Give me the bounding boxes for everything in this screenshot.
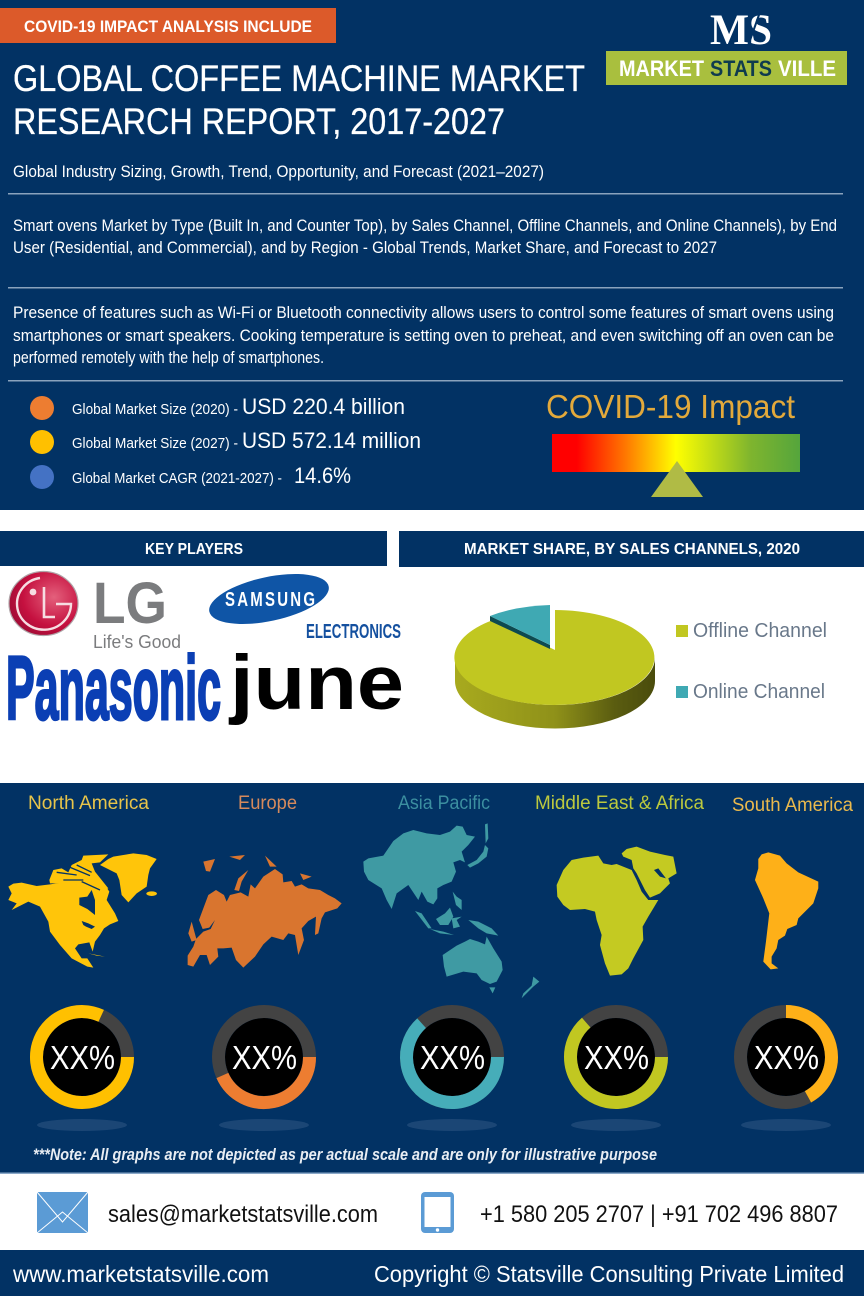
key statistics [30,394,421,489]
phone numbers: +1 580 205 2707 | +91 702 496 8807 [480,1201,838,1228]
donut: South America: XX% [754,1039,819,1076]
title: GLOBAL COFFEE MACHINE MARKET [13,58,585,99]
text block: report scope: User (Residential, and Commercial), and by Region - Global Trends, Market Share, and Forecast to 2027 [13,239,717,257]
stat: market cagr: Global Market CAGR (2021-2027) - [72,470,282,487]
stat: market cagr [30,463,351,489]
logo: LG: Life's Good [93,632,181,652]
note: ***Note: All graphs are not depicted as per actual scale and are only for illustrative purpose [33,1145,657,1164]
logo: market stats ville: MS [710,7,772,54]
donut: Europe: XX% [232,1039,297,1076]
region label: North America: North America [28,793,149,814]
heading: key players [0,531,387,566]
region label: Europe: Europe [238,793,297,814]
logo: LG [9,571,181,652]
pie: side wall [455,658,655,728]
panel: regions [0,783,864,1174]
map: South America [755,852,818,969]
logo: market stats ville: MARKET [619,56,705,81]
map: Middle East and Africa [557,847,677,976]
panel: report header [0,0,864,510]
banner: covid-19 impact analysis [0,8,336,43]
copyright: Copyright © Statsville Consulting Private Limited [374,1261,844,1287]
heading: market share: MARKET SHARE, BY SALES CHANNELS, 2020 [464,541,800,558]
logo: Samsung Electronics: SAMSUNG [225,588,315,611]
stat: market size 2027: Global Market Size (2027) - [72,435,238,452]
donut: Middle East and Africa [570,1012,662,1131]
text block: market description: smartphones or smart speakers. Cooking temperature is setting oven to preheat, and even switching off an oven can be [13,327,834,345]
covid-19 impact gauge [546,388,800,497]
legend: offline channel: Offline Channel [693,620,827,642]
stat: market cagr: 14.6% [294,463,351,488]
text block: report scope [13,217,837,257]
donut: Europe [218,1012,310,1131]
donut: Asia Pacific: XX% [420,1039,485,1076]
icon: phone [421,1192,454,1233]
email address: sales@marketstatsville.com [108,1201,378,1228]
subtitle: Global Industry Sizing, Growth, Trend, Opportunity, and Forecast (2021–2027) [13,163,544,181]
stat: market size 2020: Global Market Size (2020) - [72,401,238,418]
text block: market description: Presence of features such as Wi-Fi or Bluetooth connectivity allows users to control some features of smart ovens using [13,304,834,322]
donut: South America [740,1012,832,1131]
title: RESEARCH REPORT, 2017-2027 [13,101,505,142]
heading: key players: KEY PLAYERS [145,541,243,558]
pie: offline channel slice [454,610,654,705]
legend: online channel: Online Channel [693,681,825,703]
map: North America [8,853,157,968]
panel: key player logos [6,565,404,739]
text block: market description [13,304,834,367]
logo: june: june [228,640,404,726]
donut: North America: XX% [50,1039,115,1076]
website: www.marketstatsville.com [12,1261,269,1287]
region label: Asia Pacific: Asia Pacific [398,793,490,814]
logo: market stats ville: VILLE [778,56,836,81]
donut: Middle East and Africa: XX% [584,1039,649,1076]
logo: LG: LG [93,571,167,636]
pie: online channel slice [490,605,550,649]
stat: market size 2027: USD 572.14 million [242,428,421,453]
logo: Samsung Electronics [205,565,401,643]
stat: market size 2020: USD 220.4 billion [242,394,405,419]
logo: market stats ville [606,7,847,85]
region label: South America: South America [732,795,853,816]
title [13,58,585,142]
contact bar [37,1192,838,1233]
banner: covid-19 impact analysis: COVID-19 IMPACT ANALYSIS INCLUDE [24,17,312,36]
region label: Middle East and Africa: Middle East & Africa [535,793,704,814]
text block: market description: performed remotely with the help of smartphones. [13,349,324,367]
logo: Samsung Electronics: ELECTRONICS [306,620,401,643]
stat: market size 2027 [30,428,421,454]
panel: key player logos: Panasonic [6,639,221,739]
panel: market share pie chart [454,605,827,728]
icon: email envelope [37,1192,88,1233]
donut: North America [36,1012,128,1131]
covid-19 impact gauge: COVID-19 Impact [546,388,795,425]
stat: market size 2020 [30,394,405,420]
map: Europe [188,855,342,968]
donut: Asia Pacific [406,1012,498,1131]
footer [0,1250,864,1296]
logo: market stats ville: STATS [710,56,772,81]
map: Asia Pacific [363,823,539,998]
heading: market share [399,531,864,567]
